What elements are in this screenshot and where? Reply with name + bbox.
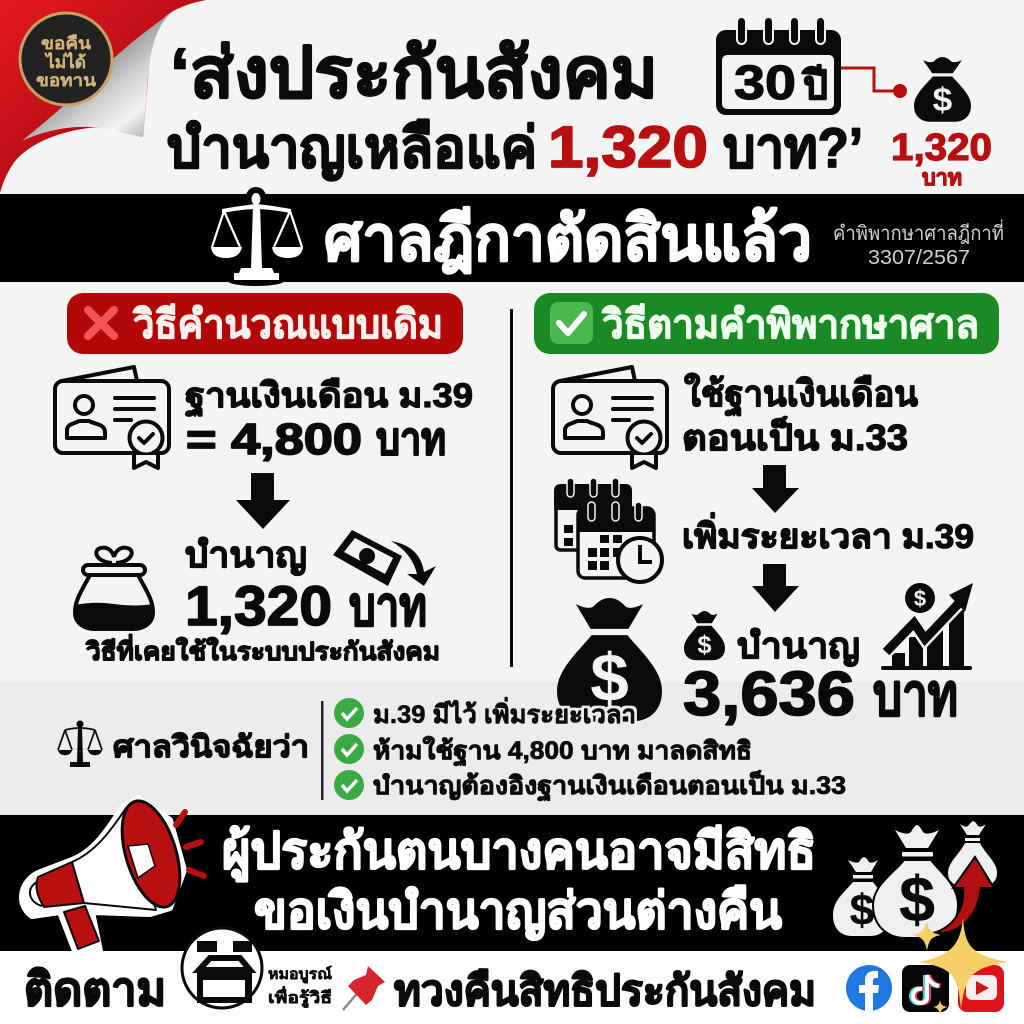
badge: ขอคืน ไม่ได้ ขอทาน: ขอทาน [36, 71, 96, 90]
pension amount new [683, 660, 958, 729]
case number: 3307/2567 [868, 247, 970, 269]
panel: court method [534, 293, 999, 729]
pension text old: บาท [349, 577, 427, 637]
title line 2 [167, 115, 863, 181]
pension label new: บำนาญ [737, 625, 860, 667]
call to action text: ผู้ประกันตนบางคนอาจมีสิทธิ [222, 823, 816, 882]
title line 2: บาท?’ [723, 116, 863, 179]
callout: 1,320 baht [891, 127, 992, 190]
icon: banknote and down arrow [333, 530, 436, 586]
icon: small money bag: $ [697, 631, 712, 659]
call to action text: ขอเงินบำนาญส่วนต่างคืน [254, 883, 782, 940]
salary text [185, 377, 473, 464]
logo [182, 928, 262, 1008]
panel: old method [55, 293, 473, 666]
bag centre: $ [899, 863, 935, 935]
connector line to money bag [841, 68, 907, 98]
header pill green [534, 293, 999, 354]
icon: money bag top: $ [933, 82, 952, 119]
header text: วิธีตามคำพิพากษาศาล [601, 303, 979, 347]
sparkles [912, 918, 1008, 1015]
callout: 1,320 baht: 1,320 [891, 127, 992, 169]
icon: small money bag [684, 611, 725, 660]
divider [510, 309, 513, 667]
callout: 1,320 baht: บาท [922, 165, 962, 190]
check item 3: บำนาญต้องอิงฐานเงินเดือนตอนเป็น ม.33 [373, 770, 846, 802]
divider line [321, 701, 324, 800]
icon: growth chart: $ [914, 586, 926, 611]
icon: small scales [58, 720, 102, 767]
icon: cross [88, 310, 114, 336]
bag left [833, 857, 890, 936]
pension text old [185, 534, 427, 637]
header text: วิธีคำนวณแบบเดิม [132, 303, 443, 347]
bag left: $ [850, 886, 874, 935]
logo caption: หมอบูรณ์ [268, 965, 332, 984]
title line 2: บำนาญเหลือแค่ [167, 116, 537, 181]
badge: ขอคืน ไม่ได้ ขอทาน: ไม่ได้ [44, 52, 86, 72]
add period text: เพิ่มระยะเวลา ม.39 [682, 512, 974, 556]
icon: youtube [958, 965, 1004, 1012]
logo caption: เพื่อรู้วิธี [268, 986, 332, 1009]
calendar label: 30 [734, 57, 796, 110]
check item 1: ม.39 มีไว้ เพิ่มระยะเวลา [373, 697, 636, 729]
case number: คำพิพากษาศาลฎีกาที่ [833, 219, 1004, 245]
icon: check box [550, 302, 593, 344]
follow label: ติดตาม [24, 963, 166, 1015]
icon: calendars and clock [554, 478, 662, 582]
salary text: = 4,800 [186, 415, 362, 464]
badge: ขอคืน ไม่ได้ ขอทาน [20, 13, 112, 105]
salary text m33: ใช้ฐานเงินเดือน [684, 372, 918, 417]
ruling label: ศาลวินิจฉัยว่า [113, 731, 309, 764]
banner: supreme court [0, 194, 1024, 282]
pension amount new: บาท [873, 663, 958, 728]
icon: red pin [343, 966, 385, 1010]
icon: calendar 30 years [716, 17, 841, 115]
arrow down [236, 473, 290, 529]
pension amount new: 3,636 [683, 660, 855, 729]
salary text: ฐานเงินเดือน ม.39 [185, 377, 473, 418]
pension text old: 1,320 [185, 574, 332, 637]
banner heading: ศาลฎีกาตัดสินแล้ว [324, 205, 812, 274]
panel: court ruling [58, 697, 846, 802]
check item 2: ห้ามใช้ฐาน 4,800 บาท มาลดสิทธิ [373, 735, 752, 767]
red arrow [933, 857, 994, 933]
icon: tiktok [902, 965, 949, 1012]
page name: ทวงคืนสิทธิประกันสังคม [394, 967, 816, 1014]
icon: money bags with red arrow [833, 821, 997, 938]
bag centre [873, 825, 958, 938]
icon: id card [553, 367, 667, 468]
salary text m33 [682, 372, 918, 458]
salary text: บาท [376, 415, 446, 464]
calendar label: ปี [802, 64, 828, 108]
bag right [948, 821, 997, 888]
icon: large money bag [557, 598, 662, 722]
icon: megaphone [22, 794, 204, 951]
banner: call to action [0, 815, 1024, 951]
badge: ขอคืน ไม่ได้ ขอทาน: ขอคืน [41, 33, 91, 53]
calendar label [734, 57, 828, 110]
case number [833, 219, 1004, 269]
icon: id card [55, 367, 169, 468]
pension text old: บำนาญ [185, 534, 307, 576]
arrow down [752, 465, 799, 513]
title line 2: 1,320 [548, 115, 708, 180]
icon: facebook [846, 965, 892, 1011]
salary text m33: ตอนเป็น ม.33 [682, 415, 908, 458]
icon: money bag top [914, 57, 971, 122]
icon: large money bag: $ [590, 640, 629, 716]
icon: growth chart [881, 583, 973, 670]
old method caption: วิธีที่เคยใช้ในระบบประกันสังคม [85, 634, 440, 666]
icon: pot [75, 548, 153, 629]
corner page curl [0, 0, 206, 193]
arrow down [752, 564, 799, 612]
icon: scales white [211, 187, 303, 286]
title line 1: ‘ส่งประกันสังคม [170, 34, 658, 112]
logo caption [268, 965, 332, 1009]
call to action text [222, 823, 816, 940]
header pill red [67, 293, 463, 354]
